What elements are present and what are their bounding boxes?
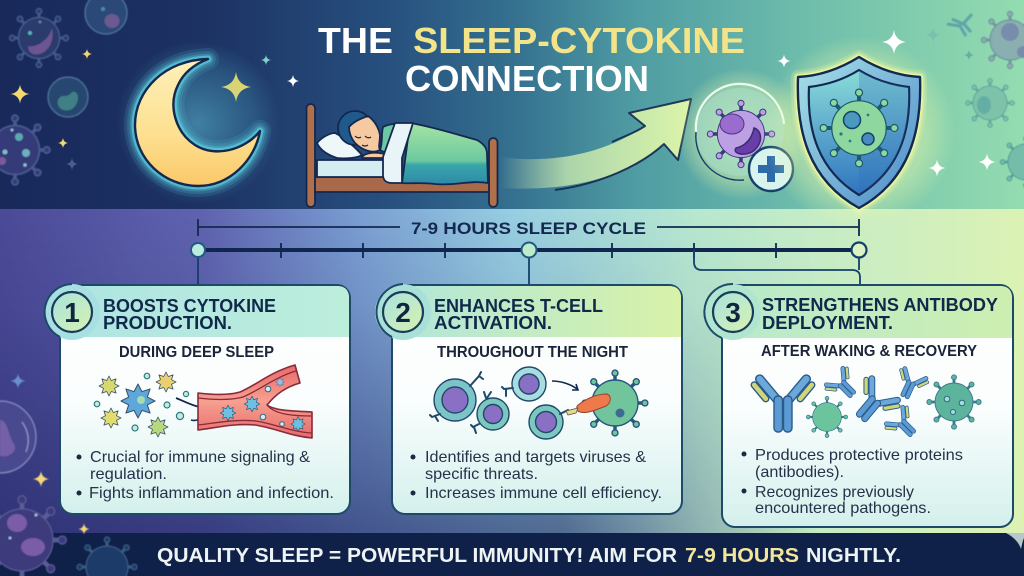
background pathogens: right header <box>947 11 1024 188</box>
card 1 heading: BOOSTS CYTOKINE <box>103 296 276 316</box>
card 1 bullets: Fights inflammation and infection. <box>89 485 334 502</box>
stars right <box>778 28 996 176</box>
card 2 header band <box>393 286 681 337</box>
stars left <box>10 49 299 170</box>
card 2 bullets: Increases immune cell efficiency. <box>425 485 662 502</box>
banner message: 7-9 HOURS <box>685 544 799 567</box>
title: SLEEP-CYTOKINE <box>413 20 745 61</box>
panel: card 2 <box>375 284 682 514</box>
icon: T-cells attacking virus <box>430 367 648 439</box>
number badge 1 <box>44 284 100 340</box>
banner message: QUALITY SLEEP = POWERFUL IMMUNITY! AIM FOR <box>157 544 677 567</box>
title: THE <box>318 20 393 61</box>
card 1 bullets: regulation. <box>90 466 167 483</box>
panel: card 3 <box>704 284 1013 527</box>
icon: cytokines entering blood vessel <box>94 365 312 438</box>
number badge 3 <box>704 284 761 340</box>
card 2 bullets <box>410 449 662 502</box>
header background <box>0 0 1024 209</box>
card 1 header band <box>61 286 349 337</box>
card 3 heading: STRENGTHENS ANTIBODY <box>762 295 998 315</box>
card 3 header band <box>723 286 1012 338</box>
card 3 bullets: Recognizes previously <box>755 484 914 501</box>
card 3 bullets: (antibodies). <box>755 464 844 481</box>
icon: antibodies and viruses <box>749 362 981 446</box>
banner message: NIGHTLY. <box>806 544 901 567</box>
banner message <box>157 544 901 567</box>
card 2 heading <box>434 296 603 333</box>
background cell: lower left <box>0 374 49 487</box>
panel: card 1 <box>44 284 350 514</box>
title <box>318 20 745 99</box>
bracket with label <box>198 219 859 238</box>
bracket with label: 7-9 HOURS SLEEP CYCLE <box>411 219 646 238</box>
arrow outline <box>555 99 691 190</box>
number badge 1: 1 <box>64 297 80 328</box>
timeline: 7-9 hours sleep cycle <box>191 219 866 286</box>
card 1 bullets <box>76 449 334 502</box>
card 3 bullets <box>742 447 963 517</box>
lower background <box>0 209 1024 533</box>
card 3 heading <box>762 295 998 333</box>
card 2 subheading: THROUGHOUT THE NIGHT <box>437 344 629 361</box>
card 2 heading: ACTIVATION. <box>434 313 552 333</box>
bottom banner <box>0 496 1024 576</box>
card 2 heading: ENHANCES T-CELL <box>434 296 603 316</box>
icon: person sleeping in bed <box>306 104 498 207</box>
card 1 subheading: DURING DEEP SLEEP <box>119 344 274 361</box>
icon: immune cell with plus badge <box>676 68 808 200</box>
number badge 2 <box>375 284 431 340</box>
arrow: sleep to immunity <box>500 99 691 189</box>
card 3 bullets: encountered pathogens. <box>755 500 931 517</box>
card 1 heading: PRODUCTION. <box>103 313 232 333</box>
card 3 heading: DEPLOYMENT. <box>762 313 893 333</box>
icon: crescent moon <box>116 41 280 205</box>
title: CONNECTION <box>405 58 649 99</box>
number badge 3: 3 <box>725 297 741 328</box>
card 1 bullets: Crucial for immune signaling & <box>90 449 310 466</box>
card 1 heading <box>103 296 276 333</box>
icon: shield with virus <box>763 36 955 228</box>
card 2 bullets: Identifies and targets viruses & <box>425 449 646 466</box>
background pathogens: left header <box>0 0 127 185</box>
card 3 bullets: Produces protective proteins <box>755 447 963 464</box>
card 2 bullets: specific threats. <box>425 466 538 483</box>
card 3 subheading: AFTER WAKING & RECOVERY <box>761 343 978 360</box>
viruses over banner <box>0 496 137 576</box>
number badge 2: 2 <box>395 297 411 328</box>
